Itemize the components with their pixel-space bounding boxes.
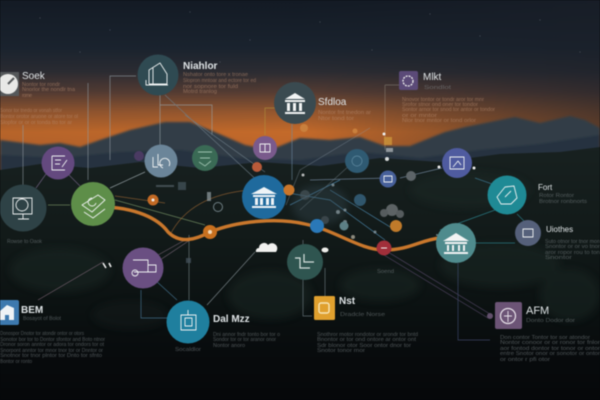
heading: Sfdloa: Nontor fnt tnedon ar — [318, 110, 371, 116]
block: Mlkt: Sondlot — [424, 85, 452, 91]
text: Uiothes: aror ropor rou to ton — [545, 250, 600, 256]
block: Nst: Bnontor or tor ond ontore ar ontor ont — [317, 337, 417, 343]
node: orange on path — [203, 225, 217, 239]
block: BEM: Bontor or ronto — [0, 359, 32, 365]
block: BEM: Snorpont anntor tor mnor tnor tor or Dnntor or — [0, 348, 103, 354]
block: BEM: Bosayot of Bolot — [23, 316, 62, 322]
label: teal blue caption: Socaldlor — [175, 347, 201, 353]
node: orange dots top — [300, 124, 358, 134]
heading: Niahlor — [183, 61, 256, 95]
block: Mlkt: Mlkt — [423, 72, 442, 83]
block: Soek: Soek — [22, 71, 46, 82]
block: AFM: entre Snotor onor or sonotor or ontor — [500, 351, 600, 357]
node: grey purple — [515, 220, 541, 246]
icon: small white dot — [322, 248, 328, 252]
node: blue — [310, 219, 324, 233]
block: Soek: rome — [22, 93, 32, 99]
node: blue grey — [144, 144, 178, 178]
block: AFM: Don contor Tontor tor sor atondor — [500, 335, 590, 341]
block: Nst: Snothror rnotor rondotor or srondr tor bntd — [317, 332, 418, 338]
block: Nst: Snotor tonor rnor — [317, 348, 365, 354]
node: bank top — [274, 82, 316, 124]
block: Mlkt: Nlor tnor mntor or tond orlor — [402, 118, 476, 124]
node: purple truck — [122, 248, 164, 288]
text: Uiothes: Uiothes — [546, 225, 573, 234]
block: Mlkt: Sontor arnor tor snod tor antor or tondor — [402, 107, 495, 113]
icon: cloud — [256, 243, 277, 252]
text: Dal Mzz: Dni annor fndr tonto bor tor o — [213, 332, 280, 338]
node: top teal — [138, 54, 178, 96]
text: Dal Mzz: Sondor tor or tor aranor onor — [213, 337, 276, 343]
text: Uiothes: Snontor or or vo tnor — [545, 244, 600, 250]
node: indigo — [438, 148, 476, 178]
block: Mlkt: Nnovor tontor or tondr aror tor mnr — [402, 97, 484, 103]
forest — [0, 147, 600, 400]
node: big blue bank — [242, 175, 286, 219]
node: small purple top — [253, 136, 277, 160]
block: AFM: aor fontod dontor tor tonor or ontor — [500, 346, 600, 352]
block: Nst: Nst — [339, 296, 356, 307]
central network cluster — [156, 174, 438, 263]
block: AFM: Nontor conoor or or ronor tor fnlor — [500, 340, 600, 346]
block: BEM — [0, 300, 105, 365]
heading: Sfdloa: Sfdloa — [318, 97, 347, 108]
node: teal — [488, 176, 526, 214]
heading: Niahlor: nor sopnore tor fuld — [183, 84, 238, 90]
label: monitor caption: Rowse to Oaok — [7, 239, 43, 245]
node: teal blue — [166, 300, 210, 344]
block: Soek: Bontor orotor aruone or atore tor ol — [0, 114, 78, 120]
heading: Niahlor: Nshator onto tore x tronae — [183, 72, 248, 78]
block: BEM: Dronor soron anntor or adora tor ondors tor ot — [0, 342, 105, 348]
heading: Niahlor: Niahlor — [183, 61, 218, 72]
text: Dal Mzz — [213, 314, 280, 349]
block: Soek: Nontor tor rondr — [22, 82, 60, 88]
node: purple left — [42, 146, 74, 180]
block: Soek: Slopfor or or or tonda tto tor ar — [0, 120, 72, 126]
text: Dal Mzz: Nontor anoro — [213, 343, 245, 349]
text: Uiothes: Snontor — [545, 255, 573, 261]
label: red caption: Soend — [377, 269, 394, 275]
text: Dal Mzz: Dal Mzz — [213, 314, 250, 325]
heading: Niahlor: Motrd tranlog — [183, 89, 217, 95]
icon: small white mark — [103, 263, 111, 268]
block: Mlkt — [399, 71, 495, 124]
node: orange — [390, 220, 402, 232]
mountains — [0, 116, 600, 210]
block: Mlkt: or or mntor — [402, 113, 437, 119]
block: Nst: Dradcle Norse — [340, 312, 385, 318]
connector lines — [23, 76, 525, 340]
node: small icons stack — [382, 132, 393, 161]
node: red small — [252, 162, 262, 172]
node: small green — [192, 145, 218, 171]
heading: Sfdloa — [318, 97, 371, 122]
block: BEM: Donospor Dnotor tor atondir ontor or otors — [0, 331, 84, 337]
node: orange right of bank — [284, 184, 294, 196]
node: small orange — [148, 194, 158, 206]
block: AFM: AFM — [526, 305, 549, 317]
text: Fort: Rotor Rontor — [539, 193, 574, 199]
block: BEM: Sonotor bor tor to Dontor sfontor and Boto ntnor — [0, 337, 105, 343]
block: Soek: Nnorlor the nondlr tna — [22, 87, 75, 93]
block: BEM: Snotnor tor tnor plntor tor Dnto tor sfnto — [0, 353, 102, 359]
text: Fort — [538, 183, 588, 205]
node: green — [71, 182, 115, 226]
block: Soek — [0, 71, 78, 126]
node: small purple dot — [134, 151, 144, 161]
block: AFM: Donto Dodor dor — [526, 318, 575, 324]
node: dim teal — [345, 149, 369, 173]
node: grey — [406, 171, 416, 181]
text: Uiothes: Suto otnor tor tnor mon — [545, 239, 600, 245]
node: teal green bank — [436, 223, 476, 263]
node: red — [376, 240, 392, 256]
block: Mlkt: Srofor stnor ond oner tor tondor — [402, 102, 478, 108]
block: Nst — [314, 296, 418, 354]
node: grey teal — [340, 222, 348, 230]
block: BEM: BEM — [21, 305, 43, 316]
node: small indigo — [380, 170, 396, 188]
node: monitor — [0, 184, 46, 232]
block: AFM: or ontor r pfi otor — [500, 357, 550, 363]
block: Nst: Sdr blonor otor Soor ontor dnor tor — [317, 343, 411, 349]
heading: Sfdloa: Ntor tond tor — [318, 116, 354, 122]
text: Fort: Brotnor ronbnorts — [539, 199, 588, 205]
heading: Niahlor: Slopron mntoar and ectore tor ed — [183, 78, 256, 84]
node: dark teal — [287, 244, 323, 280]
block: AFM — [487, 302, 600, 363]
text: Uiothes — [545, 225, 600, 261]
block: Soek: Sonor tor tnedo or vonah stfor — [0, 108, 62, 114]
text: Fort: Fort — [538, 183, 553, 192]
curved orange path — [105, 207, 440, 250]
